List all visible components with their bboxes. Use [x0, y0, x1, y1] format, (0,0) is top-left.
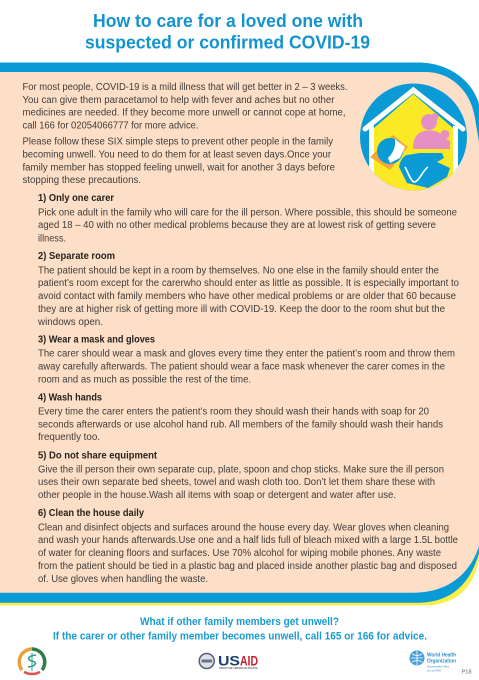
step 6: clean the house daily: 6) Clean the house daily	[38, 508, 144, 519]
step 6: clean the house daily: and wash your hands afterwards.Use one and a half lids full of bleach mixed with a large 1.5L bottle	[38, 535, 458, 546]
step 5: do not share equipment: 5) Do not share equipment	[38, 450, 158, 461]
logo: USAID: FROM THE AMERICAN PEOPLE	[219, 666, 258, 670]
step 2: separate room: avoid contact with family members who have other medical problems or are older that 60 because	[38, 291, 456, 302]
step 5: do not share equipment: Give the ill person their own separate cup, plate, spoon and chop sticks. Make sure the ill person	[38, 464, 444, 475]
logo: USAID	[199, 652, 258, 670]
step 4: wash hands: 4) Wash hands	[38, 392, 102, 403]
step 6: clean the house daily: from the patient should be tied in a plastic bag and placed inside another plastic bag and disposed	[38, 561, 457, 572]
step 4: wash hands	[38, 392, 443, 443]
intro text: Please follow these SIX simple steps to prevent other people in the family	[22, 137, 333, 148]
panel: main content background	[0, 62, 479, 606]
step 3: wear a mask and gloves: room and as much as possible the rest of the time.	[38, 374, 251, 386]
footer message	[53, 616, 427, 643]
title: How to care for a loved one with	[93, 10, 363, 31]
logo: World Health Organization: for Lao PDR	[427, 668, 441, 672]
step 3: wear a mask and gloves: 3) Wear a mask and gloves	[38, 335, 155, 346]
step 6: clean the house daily: of. Use gloves when handling the waste.	[38, 574, 208, 585]
intro text: For most people, COVID-19 is a mild illness that will get better in 2 – 3 weeks.	[22, 82, 348, 93]
step 5: do not share equipment	[38, 450, 444, 501]
step 3: wear a mask and gloves	[38, 335, 455, 386]
step 3: wear a mask and gloves: away carefully afterwards. The patient should wear a face mask whenever the carer comes in the	[38, 362, 445, 373]
step 4: wash hands: Every time the carer enters the patient’s room they should wash their hands with soap for 20	[38, 406, 429, 417]
intro text: medicines are needed. If they become more unwell or cannot cope at home,	[22, 108, 346, 119]
step 2: separate room: patient’s room except for the carerwho should enter as little as possible. It is especially important to	[38, 278, 459, 289]
intro text: stopping these precautions.	[22, 175, 141, 186]
step 3: wear a mask and gloves: The carer should wear a mask and gloves every time they enter the patient’s room and throw them	[38, 349, 455, 360]
footer message: What if other family members get unwell?	[140, 616, 339, 628]
step 1: only one carer: 1) Only one carer	[38, 193, 114, 204]
step 4: wash hands: seconds afterwards or use alcohol hand rub. All members of the family should wash their hands	[38, 419, 443, 430]
title	[85, 10, 370, 52]
patient head	[377, 138, 403, 164]
carer and child figures	[413, 113, 450, 149]
step 6: clean the house daily	[38, 508, 458, 585]
step 2: separate room: 2) Separate room	[38, 251, 115, 262]
logo: USAID: US	[218, 652, 240, 668]
step 1: only one carer: aged 18 – 40 with no other medical problems because they are at lowest risk of getting severe	[38, 220, 436, 231]
intro text: You can give them paracetamol to help with fever and aches but no other	[22, 95, 335, 106]
intro text	[22, 82, 348, 186]
logo: World Health Organization: World Health	[427, 652, 456, 658]
logo: health ministry emblem	[19, 649, 45, 674]
intro text: family member has stopped feeling unwell, wait for another 3 days before	[22, 162, 335, 173]
patient body	[399, 153, 450, 188]
logo: World Health Organization: Representative Office	[427, 664, 449, 668]
step 6: clean the house daily: Clean and disinfect objects and surfaces around the house every day. Wear gloves when cleaning	[38, 522, 449, 533]
step 2: separate room: they are at higher risk of getting more ill with COVID-19. Keep the door to the room shut but the	[38, 304, 445, 315]
step 4: wash hands: frequently too.	[38, 432, 100, 443]
step 1: only one carer: illness.	[38, 233, 66, 244]
page code: P18	[462, 670, 472, 676]
footer message: If the carer or other family member becomes unwell, call 165 or 166 for advice.	[53, 631, 427, 643]
step 1: only one carer	[38, 193, 457, 244]
step 2: separate room	[37, 251, 459, 328]
patient mask	[388, 139, 405, 163]
patient pillow	[370, 135, 408, 170]
intro text: becoming unwell. You need to do them for at least seven days.Once your	[22, 150, 332, 160]
intro text: call 166 for 02054066777 for more advice.	[22, 121, 198, 132]
step 5: do not share equipment: uses their own separate bed sheets, towel and wash cloth too. Don’t let them share these with	[38, 477, 435, 488]
title: suspected or confirmed COVID-19	[85, 32, 370, 52]
step 1: only one carer: Pick one adult in the family who will care for the ill person. Where possible, this should be someone	[38, 207, 457, 218]
step 2: separate room: The patient should be kept in a room by themselves. No one else in the family should enter the	[38, 265, 439, 276]
step 6: clean the house daily: of water for cleaning floors and surfaces. Use 70% alcohol for wiping mobile phones. Any waste	[38, 548, 441, 559]
icon: house with patient and carer	[360, 84, 467, 195]
step 5: do not share equipment: other people in the house.Wash all items with soap or detergent and water after use.	[38, 490, 396, 501]
logo: USAID: AID	[240, 652, 258, 668]
logo: World Health Organization	[410, 650, 456, 672]
logo: World Health Organization: Organization	[427, 659, 456, 665]
step 2: separate room: windows open.	[37, 317, 103, 328]
